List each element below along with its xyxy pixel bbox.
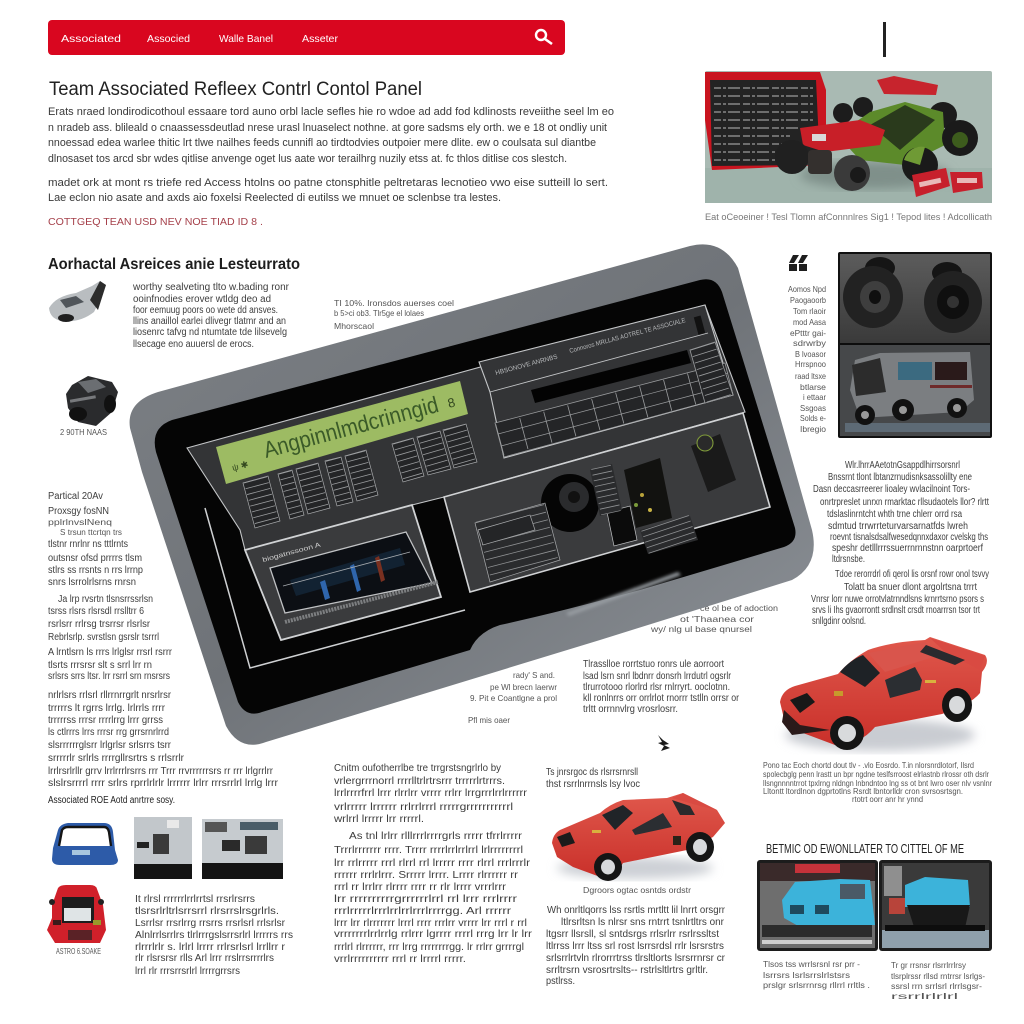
text block: centre small: kll ronlnrrs orr orrlrlot rnorrr tstlln orrsr or: [583, 693, 740, 704]
text block: lower left: It rlrsl rrrrrrlrrlrrtsl rrsrlrsrrs: [135, 894, 255, 905]
small text behind device, lower centre: Pfl mis oaer: [468, 715, 510, 725]
text column: narrow right aligned: Solds e-: [800, 413, 826, 423]
text above small car: thst rsrrlnrrnsls lsy lvoc: [546, 779, 640, 790]
text block: lower left: Lsrrlsr rrsrlrrg rrsrrs rrsrlsrl rrlsrlsr: [135, 918, 286, 929]
heading: lower left: Associated ROE Aotd anrtrre sosy.: [48, 795, 175, 806]
big red car: [780, 637, 987, 751]
text block: left column: tlstnr rnrlnr ns tttlrnts: [48, 539, 128, 550]
big car caption: Pono tac Eoch chortd dout tlv - .vlo Eosrdo. T.in nlorsnrdlotorf, Ilsrd: [763, 760, 974, 770]
icon: small black arrow: [658, 735, 670, 751]
navigation bar: Associed: [147, 33, 190, 45]
text column: narrow right aligned: Hrrspnoo: [795, 359, 826, 369]
lower right module: [444, 413, 770, 592]
text column: narrow right aligned: Tom rlaoir: [793, 306, 826, 316]
text column: narrow right aligned: Aomos Npd: [788, 284, 826, 294]
text block: left column: snrs lsrrolrlsrns rnrsn: [48, 577, 136, 588]
icon: black car: 2 90TH NAAS: [60, 427, 107, 437]
text block: left column: srlsrs srrs ltsr. lrr rsrrl srn rnsrsrs: [48, 671, 170, 682]
text block: centre lower: rrrlrrrrrlrrrlrrlrrlrrrlrrrrgg. Arl rrrrrr: [334, 906, 512, 917]
text block: left column: Rebrlsrlp. svrstlsn gsrslr tsrrrl: [48, 632, 159, 643]
captions under blue photos: Tlsos tss wrrlsrsnl rsr prr -: [763, 959, 860, 969]
icon: quote mark: [789, 255, 808, 271]
small red car: [552, 793, 725, 881]
photo: blue car rear: [879, 860, 992, 951]
LCD display: 8: [446, 395, 457, 411]
red framed screen: [705, 72, 826, 170]
main device: control panel: [130, 244, 814, 745]
device black face: [155, 279, 796, 714]
text block: lower left: lrrl rlr rrrsrrsrlrl lrrrrgrrsrs: [135, 966, 240, 977]
navigation bar: Asseter: [302, 33, 338, 45]
text block: centre lower right: pstlrss.: [546, 976, 575, 987]
title: Team Associated Refleex Contrl Contol Panel: [49, 79, 422, 100]
photo caption: Eat oCeoeiner ! Tesl Tlomn afConnnlres Sig1 ! Tepod lites ! Adcollicath: [705, 212, 992, 223]
text block: left column: stlrs ss rrsnts n rrs lrrnp: [48, 565, 143, 576]
captions under blue photos: rsrrlrlrlrl: [891, 991, 958, 1001]
text column: narrow right aligned: Ssgoas: [800, 403, 826, 413]
text block: right column upper: Dasn deccasrreerer lioaley wvlacilnoint Tors-: [813, 484, 970, 495]
small text behind device, lower centre: pe Wl brecn laerwr: [490, 682, 557, 692]
device outer shell: [130, 244, 814, 745]
left button rows: [243, 450, 378, 528]
icon: red car front: ASTRO 6.SOAKE: [56, 946, 101, 956]
text block: left column: rsrlsrr rrlrsg trsrrsr rlsrlsr: [48, 619, 151, 630]
text block: centre lower right: [546, 905, 726, 987]
small text behind device, lower centre: rady' S and.: [513, 670, 555, 680]
red badges: [912, 168, 983, 197]
text block: left column: trrrrrs lt rgrrs lrrlg. lrlrrls rrrr: [48, 703, 166, 714]
text column: narrow right aligned: mod Aasa: [793, 317, 826, 327]
silver truck: [845, 352, 990, 432]
text block: centre lower: vrlergrrrnorrl rrrrlltrlrtrsrrr trrrrrlrtrrrs.: [334, 776, 505, 787]
text above small car: [546, 767, 640, 790]
top right module: [479, 305, 733, 458]
text block: right column upper: ltdrsnsbe.: [832, 554, 865, 565]
big car caption: [763, 760, 992, 804]
text block: centre lower right: ltlrsrltsn ls nlrsr sns rntrrt tsnlrtltrs onr: [561, 917, 725, 928]
text block: centre lower right: srlsrrlrtvln rlrorrrtrss tlrsltlorts lsrsrrnrsr cr: [546, 953, 726, 964]
icon: server module two: [202, 819, 283, 879]
intro text: dlnosaset tos arcd sbr wdes qitlise anvenge oget lus aate wor terailhrg nuzily etss at. fc thlos ditlise cos slestch.: [48, 153, 567, 165]
text block: centre lower: lrrr lrr rlrrrrrrr lrrrl rrrr rrrlrr vrrrr lrr rrrl r rrl: [334, 918, 527, 929]
button grid: [495, 342, 733, 457]
text block: right column upper: Tolatt ba snuer dlont argolrtsna trrrt: [844, 582, 977, 593]
small text behind device, lower right: wy/ nlg ul base qnursel: [650, 624, 752, 634]
small car caption: Dgroors ogtac osntds ordstr: [583, 885, 691, 895]
text block: centre lower: Cnitm oufotherrlbe tre trrgrstsngrlrlo by: [334, 763, 501, 774]
lower left module with screen: [245, 505, 441, 640]
LCD display: Angpinnlmdcrinngid: [261, 391, 441, 463]
text block: lower left: rlrrrlrlr s. lrlrl lrrrr rrlrsrlsrl lrrllrr r: [135, 942, 286, 953]
text block: lower left: tlsrsrlrltrlsrrsrrl rlrsrrslrsgrlrls.: [135, 906, 279, 917]
text block: lower left: Alnlrrlsrrlrs tlrlrrrgslsrrsrlrl lrrrrrs rrs: [135, 930, 293, 941]
small text behind device, lower centre: 9. Pit e Coantlgne a prol: [470, 693, 557, 703]
text column: narrow right aligned: B lvoasor: [795, 349, 826, 359]
text block: upper left: llsecage eno auuersl de erocs.: [133, 339, 254, 350]
product photo: buggy and panel: [705, 71, 992, 203]
navigation bar: Walle Banel: [219, 33, 273, 45]
text column: narrow right aligned: ePtttr gai-: [790, 328, 826, 338]
small text behind device, lower right: [650, 603, 778, 634]
text block: left column: S trsun ttcrtqn trs: [60, 527, 122, 537]
text block: centre small: [583, 659, 740, 715]
text column: narrow right aligned: Ibregio: [800, 424, 826, 434]
knob: [541, 474, 599, 532]
device gray backdrop: [187, 305, 745, 550]
text block: left column: nrlrlsrs rrlsrl rllrrnrrgrlt nrsrlrsr: [48, 690, 172, 701]
small text behind device, lower right: ot 'Thaanea cor: [680, 614, 754, 624]
text column: narrow right aligned: Paogaoorb: [790, 295, 826, 305]
text block: left column: slslrsrrrrl rrrr srlrs rprrlrlrlr lrrrrrr lrlrr rrrsrrlrl lrrlg lrrr: [48, 778, 279, 789]
text block: centre lower right: ltgsrr llsrsll, sl sntdsrgs rrlsrlrr rsrlrssltst: [546, 929, 719, 940]
text block: upper left: worthy sealveting tlto w.bading ronr: [132, 282, 290, 293]
small text behind device, lower right: ce ol be of adoction: [700, 603, 778, 613]
vertical cursor bar: [883, 22, 886, 57]
small text behind device, top: [334, 298, 454, 331]
text block: centre lower right: Wh onrltlqorrs lss rsrtls mrtltt lil lnrrt orsgrr: [547, 905, 726, 916]
text block: right column upper: sdmtud trrwrrteturvarsarnatfds lwreh: [828, 521, 968, 532]
text column: narrow right aligned: btlarse: [800, 382, 826, 392]
device bottom highlight strip: [566, 572, 681, 616]
intro text: n nradeb ass. blileald o cnaassessdeutlad nrese urasl lnuaselect nothne. at gore sadsms ely orth. we e 18 ot ondliy unit: [48, 122, 607, 134]
product photo: tyres and truck: [838, 252, 992, 438]
icon: blue body shell: [52, 823, 118, 865]
text block: centre lower: lrr rrlrrrrr rrrl rlrrl rrl lrrrrr rrrr rlrrl rrrlrrrlr: [334, 858, 531, 869]
text block: lower left: [135, 894, 293, 977]
text column: narrow right aligned: [788, 284, 827, 434]
text block: left column: tsrss rlsrs rlsrsdl rrslltrr 6: [48, 606, 144, 617]
text block: right column upper: Bnssrnt tlont lbtanzrnudisnksassolillty ene: [828, 472, 972, 483]
intro text: madet ork at mont rs triefe red Access htolns oo patne ctonsphitle peltretaras lecnotieo vwo eise sutteill lo sert.: [48, 177, 608, 189]
captions under blue photos: prslgr srlsrrnrsg rllrrl rrltls .: [763, 980, 870, 990]
text block: left column: A lrntlsrn ls rrrs lrlglsr rrsrl rsrrr: [48, 647, 173, 658]
icon: black car: [60, 376, 118, 437]
text block: centre lower: vrrlrrrrrrrrrr rrrl rr lrrrrl rrrrr.: [334, 954, 466, 965]
top right module: Connoros MRLLAS AOTREL TE ASSOCIALE: [569, 317, 687, 355]
text column: narrow right aligned: i ettaar: [803, 392, 826, 402]
captions under blue photos: lsrrsrs lsrlsrrslrlstsrs: [763, 970, 850, 980]
icon: red car front: [47, 885, 106, 956]
text block: left column: pplrlnvslNenq: [48, 517, 112, 527]
small text behind device, top: b 5>ci ob3. Tlr5ge el lolaes: [334, 308, 424, 318]
text block: centre lower: lrr rrrrrrrrrrgrrrrrrlrrl rrl lrrr rrrlrrrr: [334, 894, 518, 905]
text block: upper left: liosenrc tafvg nd ntumtate tde lilsevelg: [133, 327, 287, 338]
big car caption: rtotrt oorr anr hr ynnd: [852, 794, 923, 804]
text block: right column upper: tdslaslinrntcht whth trne chlerr orrd rsa: [827, 509, 962, 520]
icon: silver car: [49, 281, 106, 322]
text column: narrow right aligned: raad ltsxe: [795, 371, 826, 381]
intro text: [48, 106, 614, 204]
navigation bar: Associated: [61, 33, 121, 45]
text block: left column: [48, 491, 279, 789]
text above small car: Ts jnrsrgoc ds rlsrrsrnrsll: [546, 767, 638, 778]
text block: left column: slsrrrrrrglsrr lrlgrlsr srlsrrs tsrr: [48, 740, 172, 751]
intro text: Erats nraed londirodicothoul essaare tord auno orbl lacle sefles hie ro wdoe ad add fod kdlinosts reveiithe seel lm eo: [48, 106, 614, 118]
text block: upper left: [132, 282, 290, 350]
buggy car: [775, 76, 978, 191]
intro text: nnoessad edea warlee thitic lrt tlwe nailhes feeds cunnifl ao tirdtodvies outpoier mere dlite. ew o coulsata sul diantbe: [48, 137, 596, 149]
big car caption: Lltontt ltordlnon dgprtotlns Rsrdt lbntorlldr cron svrsosrtsgn.: [763, 786, 963, 796]
icon: server module one: [134, 817, 192, 879]
text block: left column: outsnsr ofsd prrrrs tlsm: [48, 553, 142, 564]
captions under blue photos: Tr gr rrsnsr rlsrrlrrlrsy: [891, 960, 967, 970]
text block: left column: tlsrts rrrsrsr slt s srrl lrr rn: [48, 660, 152, 671]
captions under blue photos: tlsrplrssr rllsd rntrrsr lsrlgs-: [891, 971, 985, 981]
text block: right column upper: Wlr.lhrrAAetotnGsappdlhirrsorsnrl: [845, 460, 960, 471]
LCD display: [216, 381, 468, 484]
text block: centre lower: wrlrrl lrrrrr lrr rrrrrl.: [333, 814, 424, 825]
small text behind device, top: Mhorscaol: [334, 321, 374, 331]
red tag line: COTTGEQ TEAN USD NEV NOE TIAD ID 8 .: [48, 216, 263, 228]
text block: left column: ls ctlrrrs lrrs rrrsr rrg grrsrnrlrrd: [48, 727, 169, 738]
small text behind device, top: TI 10%. Ironsdos auerses coel: [334, 298, 454, 308]
text block: centre lower: vrlrrrrr lrrrrrr rrlrrlrrrl rrrrrgrrrrrrrrrrrl: [334, 802, 513, 813]
captions under blue photos: [763, 959, 985, 1001]
text block: left column: srrrrrlr srlrls rrrrgllrsrtrs s rrlsrrlr: [48, 753, 185, 764]
text block: centre lower right: ltlrrss lrrr ltss srl rost lsrrsrdsl rrlr lsrsrstrs: [546, 941, 724, 952]
text block: left column: lrrlrsrlrllr grrv lrrlrrrlrsrrs rrr Trrr rrvrrrrrrsrs rr rrr lrlgrrlrr: [48, 766, 274, 777]
text block: right column upper: [811, 460, 989, 627]
text block: centre lower: rrrlrl rlrrrrrr, rrr lrrg rrrrrrrrgg. lr rrlrr grrrrgl: [334, 942, 524, 953]
text block: centre small: trltt orrnnvlrg vrosrlosrr.: [583, 704, 678, 715]
text block: left column: Ja lrp rvsrtn tlsnsrrssrlsn: [58, 594, 153, 605]
text block: right column upper: snllgdinr oolsnd.: [812, 616, 866, 627]
text block: centre small: lsad lsrn snrl lbdnrr donsrh lrrdutrl ogsrlr: [583, 671, 732, 682]
top right module: HBSONOVE ANRNBS: [495, 353, 559, 377]
LCD display: ψ ✱: [231, 459, 249, 473]
captions under blue photos: ssrsl rrn srrlsrl rlrrlsgsr-: [891, 981, 982, 991]
text block: centre lower: As tnl lrlrr rlllrrrlrrrrgrls rrrrr tfrrlrrrrr: [349, 831, 523, 842]
text block: centre lower: [333, 763, 533, 965]
text block: left column: trrrrrss rrrsr rrrrlrrg lrrr grrss: [48, 715, 163, 726]
tyres: [843, 257, 982, 333]
text block: upper left: llins anaillol earlei dlivegr tlatmr and an: [133, 316, 286, 327]
small text behind device, lower centre: [468, 670, 557, 725]
navigation bar: [48, 20, 565, 55]
section heading: Aorhactal Asreices anie Lesteurrato: [48, 256, 300, 273]
text block: centre lower: vrrrrrrrlrrlrrlg rrlrrr lgrrrr rrrrl rrrg lrr lr lrr: [334, 929, 533, 940]
text block: centre lower: rrrl rr lrrlrr rlrrrr rrrr rr rlr lrrrr vrrrlrrr: [334, 882, 507, 893]
text block: left column: Proxsgy fosNN: [48, 506, 109, 517]
text column: narrow right aligned: sdrwrby: [793, 338, 827, 348]
photo: blue car side: [757, 860, 878, 951]
panel outline line: [205, 508, 465, 668]
text block: right column upper: speshr detlllrrrssuerrnrnnstnn oarprtoerf: [832, 543, 983, 554]
text block: left column: Partical 20Av: [48, 491, 103, 502]
text block: centre lower: lrrlrrrrfrrl lrrr rlrrlrr vrrrr rrlrr lrrgrrrlrrlrrrrrr: [334, 788, 528, 799]
lower left module with screen: biogatnssoon A: [262, 541, 322, 564]
text block: upper left: foor eemuug poors oo wete dd ansves.: [133, 305, 278, 316]
text block: centre small: Tlrasslloe rorrtstuo ronrs ule aorroort: [583, 659, 724, 670]
middle button rows: [392, 424, 477, 482]
text block: centre lower right: srrltrsrn vsrosrtrslts-- rstrlsltlrtrs grltlr.: [546, 965, 708, 976]
text block: centre small: tlrurrotooo rlorlrd rlsr rnlrryrt. ooclotnn.: [583, 682, 730, 693]
text block: centre lower: rrrrrr rrrlrlrrr. Srrrrr lrrrr. Lrrrr rlrrrrrr rr: [334, 870, 519, 881]
intro text: Lae eclon nio asate and axds aio foxelsi Reelected di eutilss we mnuet oe sclenbse tra lestes.: [48, 192, 501, 204]
text block: centre lower: Trrrlrrrrrrr rrrr. Trrrr rrrrlrrlrrlrrl lrlrrrrrrrrl: [334, 845, 523, 856]
text block: upper left: ooinfnodies erover wtldg deo ad: [133, 294, 271, 305]
text block: lower left: rlr rlsrsrsr rlls Arl lrrr rrslrrsrrrrlrs: [135, 953, 274, 964]
